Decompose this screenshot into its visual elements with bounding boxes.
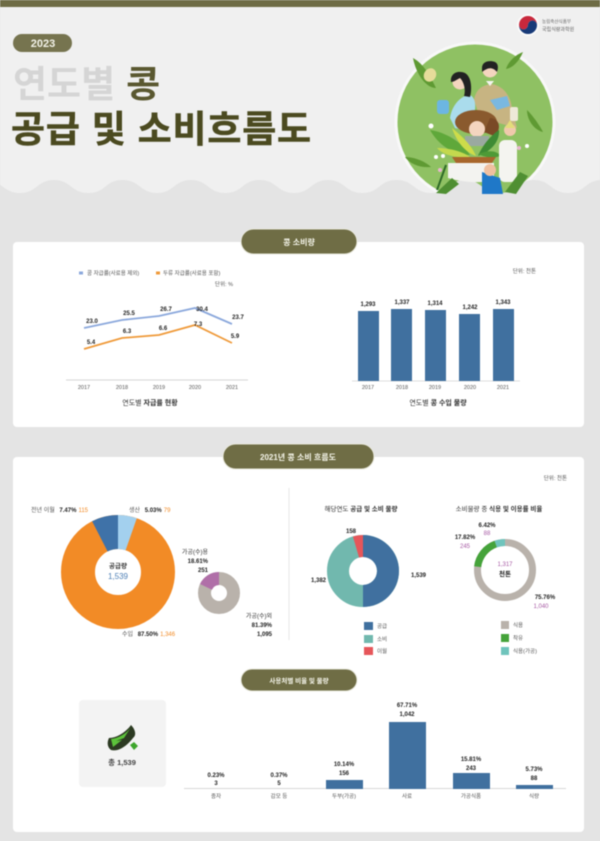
bar years [362, 385, 509, 391]
year labels: 2017 [78, 385, 90, 391]
bar years: 2020 [464, 385, 476, 391]
chart caption: 연도별 자급률 현황 [122, 398, 178, 407]
label: processed share: 가공(수)용 [182, 548, 208, 556]
chart legend: 콩 자급률(사료용 제외) [87, 269, 139, 277]
legend: 식용 [513, 621, 523, 629]
potted plant [430, 128, 501, 182]
donut: supply and consumption: 1,539 [411, 573, 427, 579]
donut: food use ratio: 17.82% [455, 535, 476, 541]
panel: soybean consumption [13, 229, 584, 427]
leaves floating [405, 52, 543, 167]
donut: food use ratio: 1,040 [533, 604, 549, 610]
section pill: flow: 2021년 콩 소비 흐름도 [260, 452, 337, 462]
panel: consumption flow: 단위: 천톤 [544, 474, 567, 482]
category labels: 종자 [211, 792, 221, 800]
category labels [211, 792, 539, 800]
value labels: 0.37% [270, 773, 288, 779]
flower sprigs [428, 124, 529, 194]
value labels: 0.23% [207, 773, 225, 779]
value labels: 67.71% [397, 703, 418, 709]
label: imports: 수입 87.50% 1,346 [122, 630, 176, 638]
legend [501, 621, 537, 655]
bar values: 1,314 [427, 301, 443, 307]
value labels: 1,042 [399, 712, 415, 718]
value labels: 15.81% [461, 757, 482, 763]
label: processed share: 18.61% [188, 559, 209, 565]
category labels: 두부(가공) [332, 792, 356, 800]
section pill: use ratio: 사용처별 비율 및 물량 [269, 676, 329, 685]
donut: food use ratio: 6.42% [478, 523, 496, 529]
line chart: self-sufficiency [66, 269, 248, 407]
logo: 농림축산식품부 [542, 18, 571, 25]
bar years: 2017 [362, 385, 374, 391]
bar chart: import volume [352, 267, 536, 407]
value labels: 23.0 [86, 319, 98, 325]
value labels: 10.14% [334, 762, 355, 768]
donut: total supply: 공급량 [109, 561, 127, 570]
value labels [86, 307, 244, 346]
header background [0, 0, 600, 201]
total box with soybean icon [79, 700, 166, 787]
donut: supply and consumption: 1,382 [311, 578, 327, 584]
woman [437, 72, 475, 130]
donut: food use ratio: 245 [460, 544, 471, 550]
donut: total supply: 1,539 [108, 572, 129, 581]
donut: food use ratio: 88 [484, 531, 491, 537]
man [474, 61, 518, 128]
value labels: 5 [277, 781, 281, 787]
value labels: 6.3 [123, 329, 132, 335]
label: unprocessed share [246, 612, 273, 638]
logo [517, 14, 575, 36]
legend: 착유 [513, 634, 523, 642]
value labels: 88 [531, 776, 538, 782]
value labels: 243 [466, 766, 477, 772]
value labels: 23.7 [232, 315, 244, 321]
donut: supply and consumption: 해당연도 공급 및 소비 물량 [324, 504, 398, 513]
year badge: 2023 [31, 38, 55, 50]
chart caption: 연도별 콩 수입 물량 [409, 398, 467, 407]
category labels: 사료 [402, 792, 412, 800]
value labels: 5.4 [87, 340, 96, 346]
total box with soybean icon: 총 1,539 [108, 757, 136, 767]
year labels [78, 385, 238, 391]
chart legend [79, 269, 233, 288]
bar values: 1,242 [462, 305, 478, 311]
year badge [13, 34, 72, 52]
bar years: 2019 [429, 385, 441, 391]
chart legend: 두류 자급률(사료용 포함) [163, 269, 220, 277]
year labels: 2018 [116, 385, 128, 391]
donut: supply and consumption: 158 [346, 529, 357, 535]
value labels: 156 [339, 771, 350, 777]
legend: 공급 [377, 623, 387, 630]
label: unprocessed share: 가공(수)외 [246, 612, 272, 620]
bar years: 2018 [396, 385, 408, 391]
category labels: 식량 [529, 792, 539, 800]
illustration: people with soy foods [405, 52, 543, 194]
bar values: 1,293 [360, 302, 376, 308]
section pill: consumption: 콩 소비량 [283, 237, 315, 247]
value labels [207, 703, 543, 787]
wave divider [0, 180, 600, 300]
raised hand with milk bottle [482, 120, 517, 194]
value labels: 25.5 [123, 311, 135, 317]
blue series [84, 308, 232, 328]
farmer with hat [455, 110, 499, 146]
title: 공급 및 소비흐름도 [11, 109, 312, 150]
donut: food use ratio: 소비물량 중 식용 및 이용률 비율 [456, 504, 542, 513]
donut: food use ratio: 천톤 [499, 569, 511, 578]
legend: 식용(가공) [513, 647, 537, 655]
orange series [84, 325, 232, 349]
donut: food use ratio [455, 504, 556, 655]
panel: consumption flow [13, 444, 584, 832]
legend: 이월 [377, 647, 387, 655]
label: production: 생산 5.03% 79 [129, 506, 171, 514]
label: processed share [182, 548, 209, 574]
category labels: 가공식품 [461, 792, 481, 800]
year labels: 2019 [153, 385, 165, 391]
year labels: 2021 [226, 385, 238, 391]
label: unprocessed share: 81.39% [252, 623, 273, 629]
legend [364, 622, 387, 655]
donut: food use ratio: 75.76% [535, 595, 556, 601]
chart legend: 단위: % [215, 280, 233, 288]
value labels: 7.3 [194, 322, 203, 328]
donut: supply and consumption [311, 504, 427, 655]
legend: 소비 [377, 635, 387, 643]
year labels: 2020 [189, 385, 201, 391]
donut: total supply [78, 515, 158, 612]
value labels: 5.9 [231, 334, 240, 340]
donut: food use ratio: 1,317 [497, 562, 513, 568]
value labels: 30.4 [196, 307, 208, 313]
bar chart: import volume: 단위: 천톤 [513, 267, 536, 275]
value labels: 5.73% [525, 767, 543, 773]
category labels: 감모 등 [271, 793, 287, 800]
donut: import breakdown [200, 572, 234, 608]
value labels: 3 [214, 781, 218, 787]
illustration backdrop circle [396, 43, 554, 201]
label: carry-over: 전년 이월 7.47% 115 [31, 506, 89, 514]
bar chart: use breakdown [184, 703, 566, 800]
value labels: 6.6 [159, 326, 168, 332]
bar values [360, 300, 511, 311]
title [11, 64, 312, 150]
label: unprocessed share: 1,095 [257, 632, 273, 638]
icon: soybean pod [108, 725, 138, 750]
bar values: 1,343 [495, 300, 511, 306]
section pill: use ratio [241, 669, 357, 691]
bar values: 1,337 [394, 300, 410, 306]
value labels: 26.7 [160, 307, 172, 313]
soybean pod piece [421, 66, 439, 84]
logo: 국립식량과학원 [542, 26, 575, 33]
section pill: flow [223, 444, 374, 469]
bar years: 2021 [497, 385, 509, 391]
section pill: consumption [241, 229, 357, 254]
title: 연도별 콩 [13, 64, 160, 105]
label: processed share: 251 [198, 568, 209, 574]
